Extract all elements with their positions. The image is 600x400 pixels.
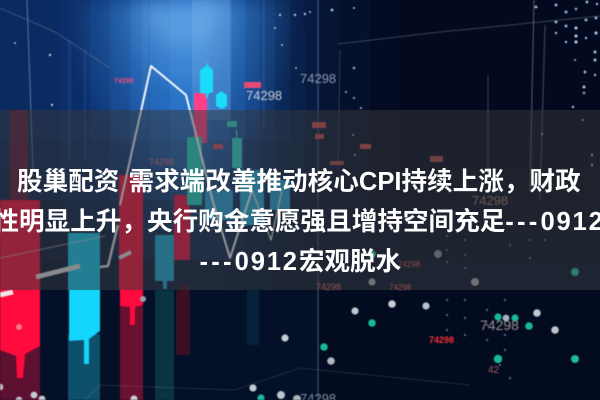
- number labels: 74298: [114, 78, 134, 85]
- translucent grey title band: [0, 110, 600, 290]
- number labels: 74298: [300, 71, 336, 86]
- candlestick: red centre: [119, 175, 143, 400]
- candlestick: upper cluster pink and cyan: [187, 62, 242, 205]
- number labels: 74298: [246, 88, 282, 103]
- number labels: 74298: [480, 317, 519, 333]
- title line 2: 性明显上升，央行购金意愿强且增持空间充足---0912: [0, 208, 600, 236]
- number labels: 42: [488, 365, 500, 376]
- title line 3: ---0912宏观脱水: [200, 248, 401, 276]
- number labels: [114, 71, 519, 400]
- number labels: 74298: [316, 282, 341, 292]
- number labels: 74298: [398, 260, 421, 269]
- number labels: 74298: [389, 283, 412, 292]
- data dots: large bubbles: [0, 250, 579, 400]
- candlestick: teal and red pair: [155, 195, 190, 400]
- trend line: white polyline: [0, 66, 282, 295]
- data dots: lower columns: [446, 224, 546, 379]
- data dots: upper area: [14, 1, 598, 166]
- number labels: 74298: [149, 157, 174, 167]
- candlestick: cyan body: [68, 233, 100, 400]
- number labels: 74298: [472, 193, 508, 208]
- candlestick: right lower cyan cluster: [205, 170, 290, 225]
- candlestick: large red lower left: [0, 200, 40, 400]
- title line 1: 股巢配资 需求端改善推动核心CPI持续上涨，财政: [17, 168, 581, 196]
- number labels: 74298: [429, 335, 454, 345]
